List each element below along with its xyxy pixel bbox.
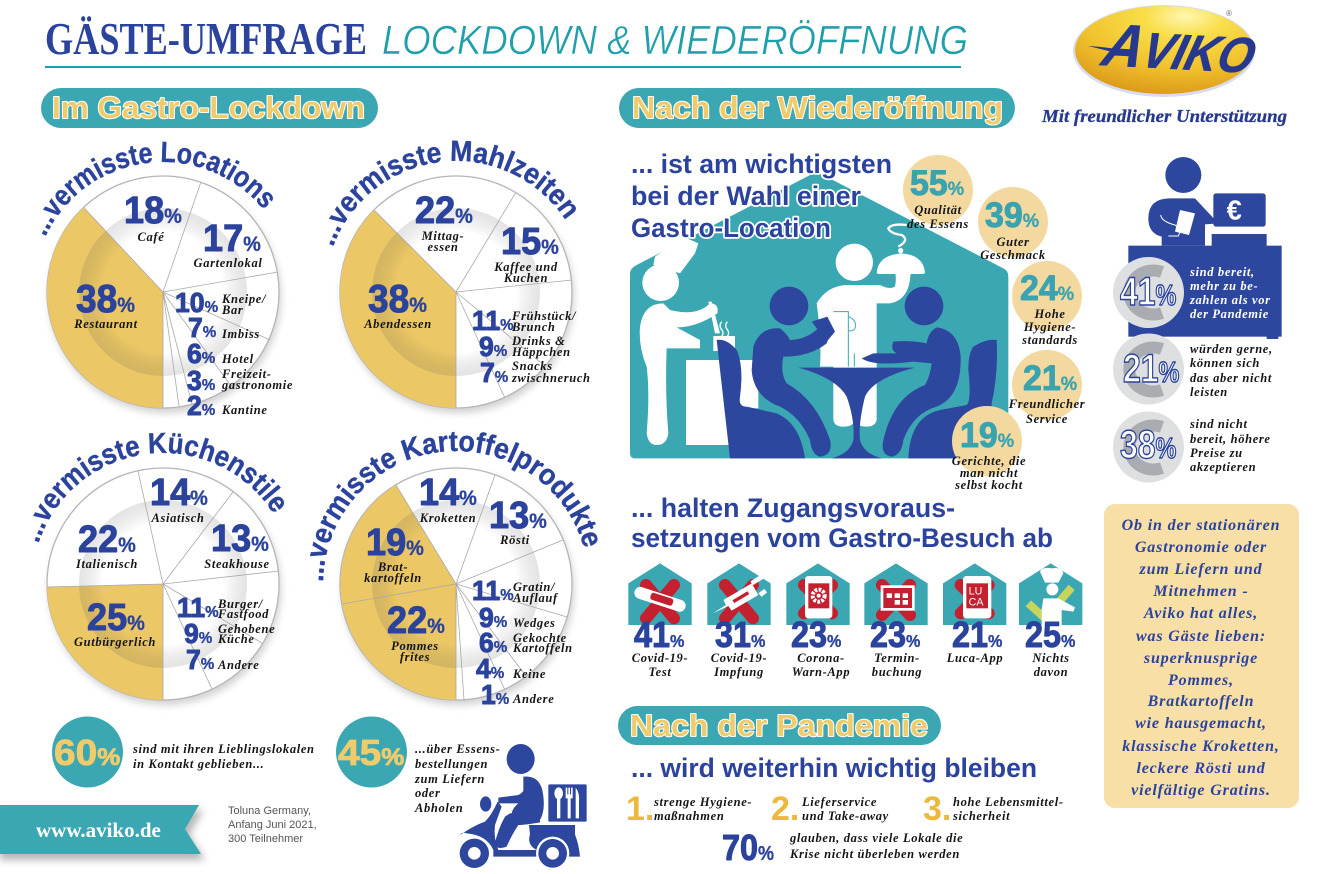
stat: Bratkartoffeln: 19%: [366, 520, 424, 563]
title: GÄSTE-UMFRAGE: [45, 14, 367, 64]
source note: 300 Teilnehmer: [228, 833, 303, 845]
stat: Gekochte Kartoffeln: Gekochte: [513, 631, 567, 645]
stat: Kaffee und Kuchen: 15%: [501, 219, 559, 262]
stat: Mittagessen: 22%: [415, 188, 473, 231]
stat: Abendessen: Abendessen: [363, 317, 432, 331]
stat: Pommes frites: frites: [400, 650, 430, 664]
stat: Freizeitgastronomie: gastronomie: [221, 378, 293, 392]
plate: [47, 176, 281, 413]
stat: Kroketten: Kroketten: [419, 511, 476, 525]
stat: Burger/Fastfood: Burger/: [217, 597, 264, 611]
logo: Aviko: [1073, 5, 1264, 97]
callout: 45%: 45%: [338, 732, 404, 773]
stat: 41% Covid-19-Test: 41%: [634, 615, 684, 655]
callout: 60%: 60%: [54, 732, 120, 773]
stat: Gartenlokal: 17%: [203, 216, 261, 259]
source note: Anfang Juni 2021,: [228, 819, 317, 831]
stat: Andere: [481, 678, 554, 710]
stat: 38% nicht bereit: bereit, höhere: [1190, 432, 1271, 446]
stat: Andere: [186, 643, 259, 675]
stat: Bratkartoffeln: Brat-: [377, 560, 408, 574]
stat: Keine: [476, 652, 546, 684]
panel: Preisbereitschaft icon: [1128, 157, 1282, 339]
stat: Andere: Andere: [217, 658, 259, 672]
heading: Nach der Pandemie: Nach der Pandemie: [630, 708, 928, 743]
chef: [640, 237, 758, 445]
stat: Keine: 4%: [476, 652, 504, 684]
stat: Abendessen: [363, 278, 432, 331]
stat: Kantine: 2%: [187, 389, 215, 421]
stat: Gutbürgerlich: 25%: [87, 595, 145, 638]
stat: Gratin/Auflauf: Auflauf: [512, 591, 559, 605]
stat: Gehobene Küche: Küche: [217, 632, 255, 646]
heading: ist am wichtigsten: [631, 149, 892, 243]
stat: Gartenlokal: [194, 216, 262, 270]
stat: Drinks & Häppchen: Häppchen: [511, 345, 571, 359]
logo: Aviko: ®: [1226, 9, 1232, 18]
stat: 19% Gerichte: Gerichte, die: [952, 454, 1026, 468]
stat: 70%: glauben, dass viele Lokale die: [789, 831, 963, 845]
ranking: 2: 2.: [771, 790, 799, 828]
stat: 25% Nichts davon: davon: [1034, 665, 1068, 679]
stat: 55% Qualität: des Essens: [907, 217, 969, 231]
stat: 21% Luca-App: Luca-App: [946, 651, 1003, 665]
callout: 45%: oder: [415, 786, 441, 800]
heading: Im Gastro-Lockdown: Im Gastro-Lockdown: [52, 90, 365, 125]
stat: Mittagessen: [415, 188, 473, 254]
banner: www.aviko.de: www.aviko.de: [36, 818, 161, 842]
stat: 23% Corona-Warn-App: Warn-App: [792, 665, 850, 679]
stat: 41% Covid-19-Test: [632, 615, 688, 679]
guest left: [752, 287, 835, 457]
ranking: 3: [923, 790, 1064, 828]
stat: Gutbürgerlich: Gutbürgerlich: [74, 635, 156, 649]
stat: Hotel: [187, 337, 254, 369]
stat: 23% Terminbuchung: [870, 615, 922, 679]
house: [630, 172, 1008, 458]
panel: Aviko callout: leckere Rösti und: [1136, 760, 1266, 777]
stat: 31% Covid-19-Impfung: [711, 615, 767, 679]
stat: Hotel: Hotel: [221, 352, 254, 366]
stat: 41% bereit: der Pandemie: [1190, 307, 1269, 321]
stat: 23% Terminbuchung: Termin-: [874, 651, 920, 665]
stat: 21% gerne: 21%: [1123, 346, 1179, 391]
stat: Gratin/Auflauf: [472, 574, 559, 606]
stat: Café: Café: [138, 230, 164, 244]
panel: Aviko callout: Mitnehmen -: [1152, 583, 1249, 600]
plate: [340, 176, 574, 413]
callout: 60%: in Kontakt geblieben...: [133, 757, 264, 771]
source note: Toluna Germany,: [228, 805, 311, 817]
stat: Freizeitgastronomie: 3%: [187, 364, 215, 396]
icon row: access requirements: [628, 563, 1082, 625]
stat: Steakhouse: [204, 516, 270, 571]
stat: 70%: 70%: [722, 828, 774, 868]
panel: vermisste Locations: [42, 142, 293, 421]
ranking: 3: 3.: [923, 790, 951, 828]
table: [798, 368, 915, 458]
stat: 25% Nichts davon: [1025, 615, 1075, 679]
stat: 31% Covid-19-Impfung: Impfung: [713, 665, 764, 679]
stat: Drinks & Häppchen: [479, 330, 571, 362]
stat: 23% Terminbuchung: 23%: [870, 615, 920, 655]
callout: 45%: [336, 716, 500, 815]
curved heading: ...vermisste Kartoffelprodukte: [310, 432, 598, 580]
stat: Gekochte Kartoffeln: Kartoffeln: [512, 641, 573, 655]
stat: 55% Qualität: Qualität: [914, 203, 962, 217]
stat: 70%: Krise nicht überleben werden: [789, 847, 960, 861]
stat: 41% bereit: [1113, 257, 1271, 328]
stat: Pommes frites: 22%: [387, 598, 445, 641]
stat: 38% nicht bereit: [1113, 412, 1271, 482]
panel: Aviko callout: [1104, 504, 1299, 808]
ranking: 3: sicherheit: [952, 809, 1010, 823]
person at cash desk: [1128, 157, 1282, 339]
stat: 23% Terminbuchung: buchung: [872, 665, 922, 679]
stat: Restaurant: Restaurant: [73, 317, 138, 331]
stat: Kneipe/Bar: 10%: [175, 286, 218, 318]
stat: 38% nicht bereit: Preise zu: [1190, 446, 1243, 460]
stat: Imbiss: 7%: [188, 311, 216, 343]
stat: 24% Hygiene: 24%: [1020, 270, 1074, 308]
ranking: 2: und Take-away: [802, 809, 889, 823]
stat: Rösti: 13%: [489, 493, 547, 536]
heading: Nach der Wiederöffnung: Nach der Wiederöffnung: [632, 90, 1003, 125]
stat: 21% Service: Freundlicher: [1008, 397, 1085, 411]
heading: wird weiterhin wichtig bleiben: ... wird weiterhin wichtig bleiben: [631, 753, 1037, 783]
stat: 25% Nichts davon: Nichts: [1031, 651, 1070, 665]
stat: 41% bereit: mehr zu be-: [1190, 279, 1258, 293]
logo: Aviko: AVIKO: [1095, 11, 1264, 86]
stat: Asiatisch: Asiatisch: [150, 511, 205, 525]
stat: Frühstück/Brunch: Brunch: [511, 320, 556, 334]
heading: Zugangsvoraussetzungen: setzungen vom Gastro-Besuch ab: [631, 523, 1053, 553]
panel: Aviko callout: Ob in der stationären: [1122, 517, 1280, 534]
stat: 39% Guter Geschmack: Guter: [996, 235, 1030, 249]
icon: nothing: [1019, 563, 1082, 625]
stat: Snacks zwischendurch: Snacks: [512, 359, 553, 373]
ranking: 1: strenge Hygiene-: [653, 795, 752, 809]
stat: 41% bereit: zahlen als vor: [1189, 293, 1271, 307]
callout: 45%: bestellungen: [415, 757, 488, 771]
stat: Kantine: [187, 389, 268, 421]
stat: 39% Guter Geschmack: 39%: [985, 197, 1039, 235]
stat: 24% Hygiene: Hohe: [1033, 307, 1066, 321]
stat: Burger/Fastfood: 11%: [177, 591, 219, 623]
curved heading: ...vermisste Küchenstile: [33, 432, 284, 542]
stat: Steakhouse: Steakhouse: [204, 557, 270, 571]
jug: [833, 312, 855, 367]
stat: 41% bereit: sind bereit,: [1189, 265, 1255, 279]
stat: 23% Corona-Warn-App: 23%: [791, 615, 841, 655]
stat: Keine: Keine: [512, 667, 546, 681]
callout: 45%: Abholen: [414, 801, 463, 815]
panel: Aviko callout: Aviko hat alles,: [1143, 605, 1258, 622]
stat: Steakhouse: 13%: [211, 516, 269, 559]
stat: Kantine: Kantine: [221, 403, 268, 417]
icon: appointment: [864, 563, 928, 625]
heading: ist am wichtigsten: ... ist am wichtigsten: [631, 149, 892, 179]
stat: 39% Guter Geschmack: [978, 187, 1048, 262]
stat: Frühstück/Brunch: 11%: [472, 304, 514, 336]
panel: Aviko callout: Pommes,: [1167, 672, 1234, 689]
stat: 41% Covid-19-Test: Covid-19-: [632, 651, 688, 665]
right chair: [908, 340, 997, 458]
stat: 21% Luca-App: 21%: [952, 615, 1002, 655]
ranking: 2: Lieferservice: [801, 795, 877, 809]
stat: Gekochte Kartoffeln: [479, 626, 573, 658]
plate: [47, 468, 281, 705]
stat: 21% gerne: leisten: [1190, 385, 1228, 399]
stat: 55% Qualität: [903, 155, 973, 231]
stat: Hotel: 6%: [187, 337, 215, 369]
stat: Italienisch: Italienisch: [75, 557, 138, 571]
stat: Restaurant: 38%: [76, 278, 135, 321]
illustration: restaurant house: [630, 172, 1008, 458]
stat: Mittagessen: essen: [427, 240, 459, 254]
stat: Abendessen: 38%: [368, 278, 427, 321]
stat: Wedges: Wedges: [513, 616, 556, 630]
ranking: 2: [771, 790, 889, 828]
stat: Snacks zwischendurch: 7%: [480, 356, 508, 388]
stat: Drinks & Häppchen: 9%: [479, 330, 507, 362]
stat: 21% Service: Service: [1026, 412, 1068, 426]
stat: Wedges: 9%: [479, 601, 507, 633]
stat: Gratin/Auflauf: Gratin/: [513, 580, 556, 594]
stat: Kneipe/Bar: [175, 286, 267, 318]
stat: Asiatisch: 14%: [150, 470, 208, 513]
stat: 19% Gerichte: [952, 406, 1026, 492]
panel: vermisste Mahlzeiten: [329, 140, 591, 416]
banner: www.aviko.de: [0, 805, 205, 860]
stat: Pommes frites: [387, 598, 445, 664]
icon: corona warn app: [786, 563, 850, 625]
stat: 21% gerne: können sich: [1190, 356, 1260, 370]
ranking: 1: maßnahmen: [654, 809, 724, 823]
stat: 70%: [722, 828, 963, 868]
stat: Freizeitgastronomie: [187, 364, 293, 396]
stat: Burger/Fastfood: Fastfood: [217, 607, 269, 621]
stat: 55% Qualität: 55%: [910, 165, 964, 203]
stat: Frühstück/Brunch: Frühstück/: [511, 309, 577, 323]
stat: Rösti: Rösti: [499, 533, 530, 547]
sponsor line: Mit freundlicher Unterstützung: [1041, 106, 1287, 126]
stat: 41% bereit: 41%: [1120, 269, 1176, 314]
stat: Freizeitgastronomie: Freizeit-: [221, 367, 272, 381]
stat: Imbiss: Imbiss: [221, 327, 260, 341]
ranking: 1: 1.: [626, 790, 654, 828]
stat: Andere: 7%: [186, 643, 214, 675]
stat: Burger/Fastfood: [177, 591, 269, 623]
panel: Aviko callout: superknusprige: [1143, 650, 1258, 667]
stat: Kneipe/Bar: Bar: [221, 303, 243, 317]
stat: 21% Service: [1008, 350, 1085, 426]
stat: 19% Gerichte: man nicht: [960, 466, 1018, 480]
stat: 24% Hygiene: standards: [1021, 333, 1078, 347]
heading: Zugangsvoraussetzungen: ... halten Zugangsvoraus-: [631, 493, 955, 523]
ranking: 3: hohe Lebensmittel-: [953, 795, 1064, 809]
plate: [340, 468, 574, 705]
stat: Pommes frites: Pommes: [391, 639, 439, 653]
stat: Snacks zwischendurch: [480, 356, 591, 388]
callout: 60%: sind mit ihren Lieblingslokalen: [132, 742, 315, 756]
stat: Gekochte Kartoffeln: 6%: [479, 626, 507, 658]
stat: Mittagessen: Mittag-: [421, 229, 464, 243]
stat: 21% gerne: [1113, 334, 1273, 404]
panel: Aviko callout: vielfältige Gratins.: [1131, 782, 1271, 799]
callout: 60%: [52, 716, 315, 788]
stat: Bratkartoffeln: [364, 520, 424, 585]
icon: luca app: LU: [969, 585, 982, 597]
heading: ist am wichtigsten: bei der Wahl einer: [631, 181, 861, 211]
guest right: [862, 287, 961, 457]
panel: Aviko callout: klassische Kroketten,: [1122, 738, 1280, 755]
stat: Drinks & Häppchen: Drinks &: [511, 334, 565, 348]
stat: Italienisch: 22%: [78, 517, 136, 560]
stat: Café: 18%: [124, 188, 182, 231]
stat: 21% Service: 21%: [1023, 360, 1077, 398]
stat: 38% nicht bereit: sind nicht: [1189, 417, 1248, 431]
stat: Gratin/Auflauf: 11%: [472, 574, 514, 606]
stat: 24% Hygiene: Hygiene-: [1023, 320, 1076, 334]
stat: Frühstück/Brunch: [472, 304, 577, 336]
stat: 25% Nichts davon: 25%: [1025, 615, 1075, 655]
stat: 38% nicht bereit: 38%: [1120, 422, 1176, 467]
stat: 19% Gerichte: 19%: [960, 417, 1014, 455]
stat: Snacks zwischendurch: zwischneruch: [511, 371, 591, 385]
stat: Andere: 1%: [481, 678, 509, 710]
heading: Zugangsvoraussetzungen: [631, 493, 1053, 553]
stat: 24% Hygiene: [1012, 261, 1082, 347]
stat: Wedges: [479, 601, 556, 633]
waiter: [817, 244, 925, 427]
curved heading: ...vermisste Locations: [42, 142, 273, 236]
stat: Kaffee und Kuchen: Kuchen: [503, 271, 548, 285]
stat: Imbiss: [188, 311, 260, 343]
panel: vermisste Küchenstile: [33, 432, 284, 708]
stat: 39% Guter Geschmack: Geschmack: [980, 248, 1046, 262]
stat: Gehobene Küche: Gehobene: [218, 622, 275, 636]
stat: 41% Covid-19-Test: Test: [649, 665, 671, 679]
title: [45, 14, 968, 68]
stat: Gehobene Küche: 9%: [184, 617, 212, 649]
ranking: 1: [626, 790, 752, 828]
stat: 38% nicht bereit: akzeptieren: [1190, 460, 1256, 474]
stat: Kaffee und Kuchen: Kaffee und: [493, 260, 558, 274]
heading: ist am wichtigsten: Gastro-Location: [631, 213, 831, 243]
title: LOCKDOWN & WIEDERÖFFNUNG: [382, 17, 968, 63]
panel: Aviko callout: Bratkartoffeln: [1147, 693, 1254, 710]
panel: Aviko callout: wie hausgemacht,: [1135, 715, 1267, 732]
stat: 21% gerne: würden gerne,: [1190, 342, 1273, 356]
icon: vaccine: [707, 563, 771, 625]
stat: Kaffee und Kuchen: [493, 219, 559, 285]
panel: Aviko callout: Gastronomie oder: [1135, 539, 1267, 556]
stat: Andere: Andere: [512, 692, 554, 706]
callout: 45%: zum Liefern: [414, 772, 485, 786]
stat: 31% Covid-19-Impfung: 31%: [715, 615, 765, 655]
stat: Bratkartoffeln: kartoffeln: [364, 571, 422, 585]
stat: 23% Corona-Warn-App: [791, 615, 850, 679]
stat: Gutbürgerlich: [74, 595, 156, 649]
icon: covid test: [628, 563, 692, 625]
icon: luca app: CA: [969, 596, 984, 608]
curved heading: ...vermisste Mahlzeiten: [329, 140, 576, 246]
stat: 19% Gerichte: selbst kocht: [954, 478, 1023, 492]
stat: Gartenlokal: Gartenlokal: [194, 256, 262, 270]
callout: 45%: ...über Essens-: [415, 742, 500, 756]
stat: 23% Corona-Warn-App: Corona-: [797, 651, 845, 665]
panel: Aviko callout: was Gäste lieben:: [1136, 628, 1266, 645]
left chair: [717, 340, 805, 458]
stat: Kneipe/Bar: Kneipe/: [221, 292, 267, 306]
stat: 31% Covid-19-Impfung: Covid-19-: [711, 651, 767, 665]
stat: Gehobene Küche: [184, 617, 275, 649]
panel: vermisste Kartoffelprodukte: [310, 432, 598, 710]
panel: Aviko callout: zum Liefern und: [1138, 561, 1263, 578]
stat: Kroketten: 14%: [419, 470, 477, 513]
icon: delivery scooter: [460, 744, 587, 870]
icon: luca app: [943, 563, 1006, 625]
stat: 21% gerne: das aber nicht: [1190, 371, 1272, 385]
panel: Preisbereitschaft icon: €: [1227, 194, 1242, 225]
